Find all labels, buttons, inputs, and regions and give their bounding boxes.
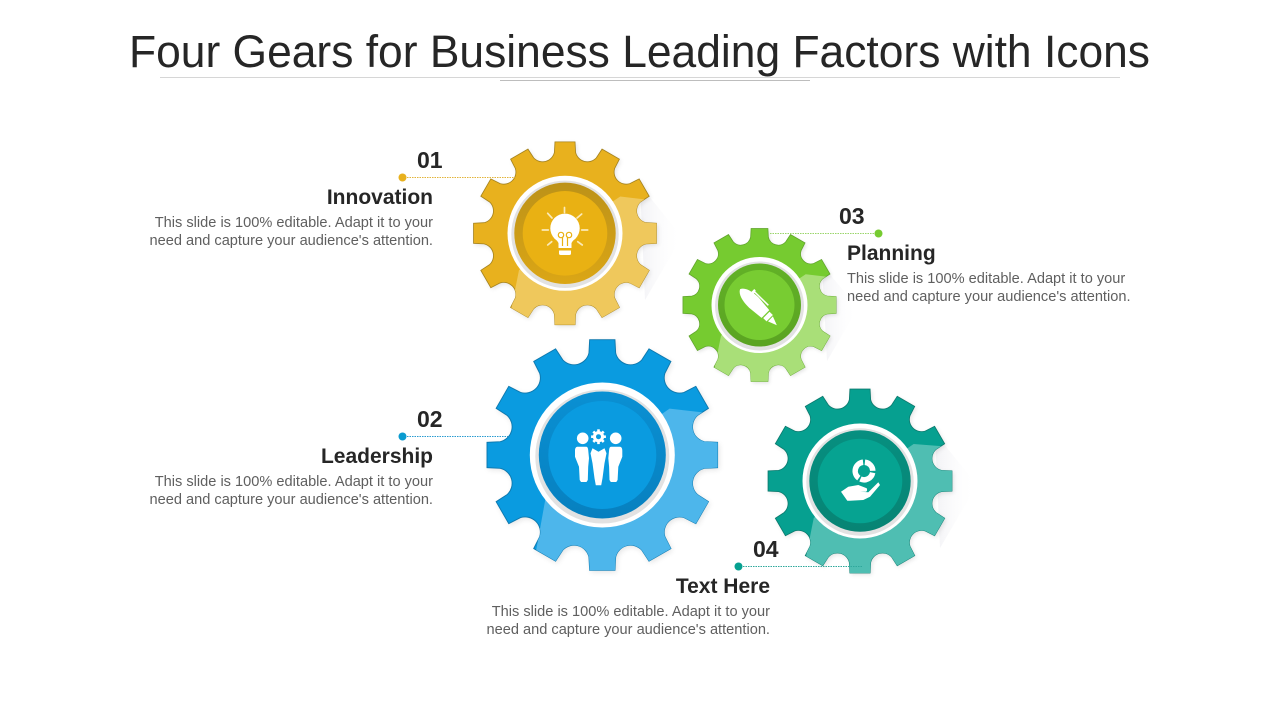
callout 03: planning: need and capture your audience's attention.	[847, 289, 1131, 305]
connector 04	[734, 562, 862, 570]
callout 04: text here: 04	[753, 536, 779, 562]
callout 04: text here	[486, 536, 862, 638]
gear shadow: text here	[935, 433, 977, 548]
gear shadow: innovation	[640, 185, 682, 300]
connector 01	[398, 174, 515, 182]
callout 02: leadership: This slide is 100% editable. Adapt it to your	[155, 474, 433, 490]
callout 01: innovation	[149, 147, 515, 249]
callout 03: planning: This slide is 100% editable. Adapt it to your	[847, 271, 1125, 287]
callout 04: text here: need and capture your audience's attention.	[486, 622, 770, 638]
connector 03	[770, 230, 882, 238]
callout 01: innovation: 01	[417, 147, 443, 173]
callout 03: planning: Planning	[847, 242, 936, 265]
callout 03: planning	[770, 203, 1131, 305]
icon: hand holding pie chart	[841, 462, 880, 501]
connector 02	[398, 432, 510, 440]
callout 01: innovation: This slide is 100% editable. Adapt it to your	[155, 215, 433, 231]
gear shadow: planning	[822, 265, 858, 361]
callout 04: text here: Text Here	[676, 575, 770, 598]
callout 02: leadership: 02	[417, 406, 443, 432]
callout 02: leadership: Leadership	[321, 445, 433, 468]
title: Four Gears for Business Leading Factors with Icons	[129, 26, 1150, 77]
icon: pen	[735, 282, 784, 330]
gear 02: leadership	[487, 340, 730, 583]
gear 03: planning	[683, 228, 844, 390]
gear 04: text here	[768, 389, 962, 583]
icon: team with gear	[575, 429, 622, 485]
callout 02: leadership	[149, 406, 510, 508]
callout 02: leadership: need and capture your audience's attention.	[149, 492, 433, 508]
callout 01: innovation: Innovation	[327, 186, 433, 209]
callout 03: planning: 03	[839, 203, 865, 229]
callout 04: text here: This slide is 100% editable. Adapt it to your	[492, 604, 770, 620]
icon: light bulb	[542, 208, 588, 255]
gear 01: innovation	[474, 142, 666, 334]
callout 01: innovation: need and capture your audience's attention.	[149, 233, 433, 249]
